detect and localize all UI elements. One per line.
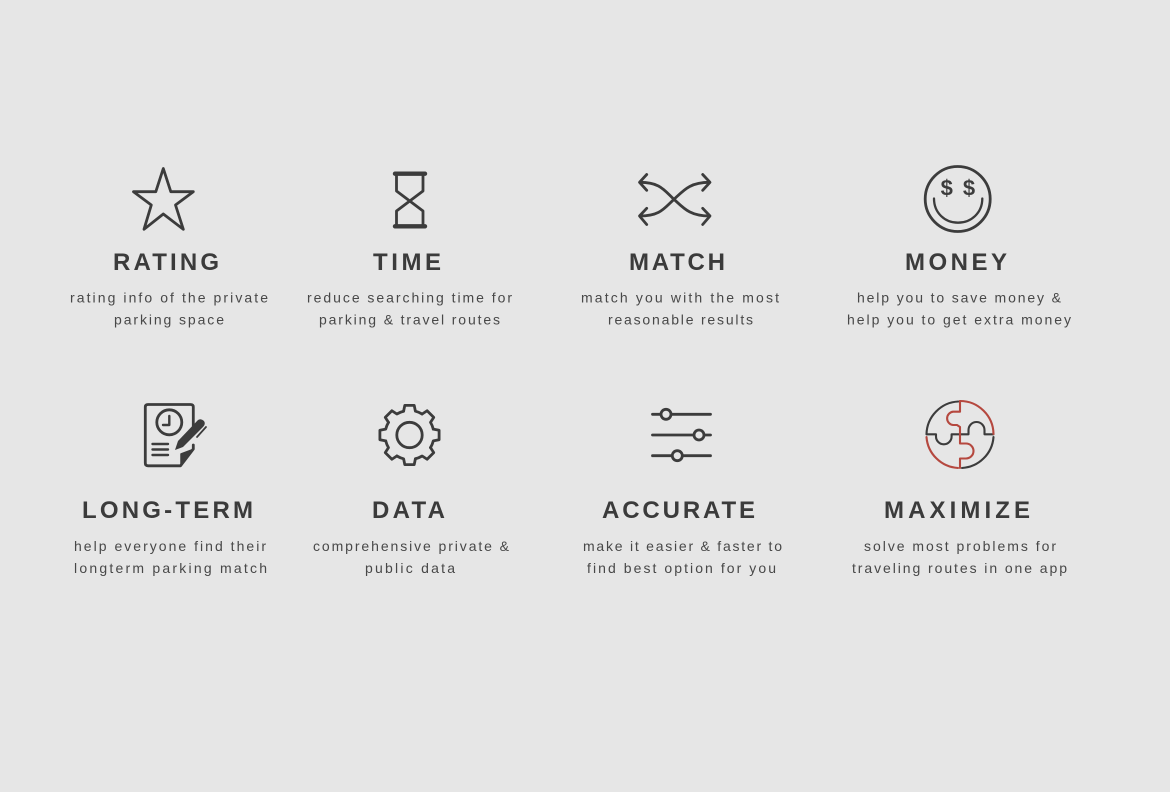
text: data description: comprehensive private & (313, 538, 510, 554)
icon: star (134, 168, 193, 229)
text: accurate description (583, 538, 782, 576)
heading: maximize: MAXIMIZE (884, 497, 1030, 524)
icon: hourglass (395, 174, 425, 226)
heading: money: MONEY (905, 249, 1007, 276)
text: data description: public data (365, 560, 455, 576)
text: long-term description: longterm parking match (74, 560, 267, 576)
text: time description: parking & travel routes (319, 312, 500, 328)
text: accurate description: find best option for you (587, 560, 776, 576)
heading: rating: RATING (113, 249, 219, 276)
text: match description (581, 290, 779, 328)
panel: time (307, 174, 512, 328)
panel: data (313, 405, 510, 576)
icon: smiley with dollar eyes (925, 166, 990, 232)
icon: crossing arrows (640, 174, 710, 224)
panel: long-term (74, 404, 267, 576)
heading: data: DATA (372, 497, 445, 524)
text: data description (313, 538, 510, 576)
text: money description: help you to save money & (857, 290, 1062, 306)
text: rating description: rating info of the private (70, 290, 268, 306)
icon: smiley with dollar eyes: $ (941, 176, 953, 200)
panel: maximize (852, 401, 1067, 576)
icon: sliders (652, 409, 710, 461)
icon: smiley with dollar eyes: $ (963, 176, 975, 200)
text: match description: reasonable results (608, 312, 753, 328)
text: maximize description: solve most problems for (864, 538, 1056, 554)
heading: long-term: LONG-TERM (82, 497, 253, 524)
text: match description: match you with the most (581, 290, 779, 306)
heading: time: TIME (373, 249, 441, 276)
text: long-term description (74, 538, 267, 576)
text: time description: reduce searching time for (307, 290, 512, 306)
text: maximize description: traveling routes in one app (852, 560, 1067, 576)
text: money description (847, 290, 1071, 328)
icon: gear (380, 405, 439, 465)
panel: money (847, 166, 1071, 328)
panel: match (581, 174, 779, 328)
text: accurate description: make it easier & faster to (583, 538, 782, 554)
panel: accurate (583, 409, 782, 576)
text: long-term description: help everyone find their (74, 538, 266, 554)
text: maximize description (852, 538, 1067, 576)
heading: accurate: ACCURATE (602, 497, 755, 524)
text: rating description: parking space (114, 312, 224, 328)
text: time description (307, 290, 512, 328)
text: money description: help you to get extra money (847, 312, 1071, 328)
icon: puzzle (926, 401, 994, 468)
icon: document with clock and pen (145, 404, 206, 466)
heading: match: MATCH (629, 249, 725, 276)
text: rating description (70, 290, 268, 328)
panel: rating (70, 168, 268, 328)
